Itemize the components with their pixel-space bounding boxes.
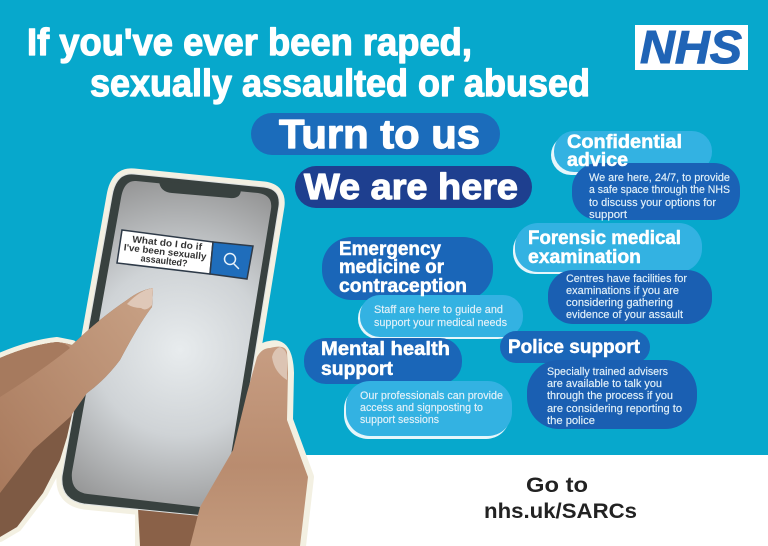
heading: mental health support: support: [321, 359, 394, 380]
right hand: [190, 347, 308, 546]
text: mental health support: access and signposting to: [360, 402, 483, 414]
text: emergency medicine: [374, 304, 507, 329]
banner: turn to us: Turn to us: [279, 111, 480, 157]
cream cut-out outline: [0, 174, 308, 546]
heading: mental health support: [321, 339, 450, 380]
text: forensic medical examination: examinations if you are: [566, 285, 679, 297]
text: police support: [547, 366, 682, 427]
search text: I've been sexually: [123, 242, 208, 263]
heading: confidential advice: [567, 132, 682, 171]
text: mental health support: Our professionals can provide: [360, 390, 503, 402]
panel: confidential advice: [551, 131, 740, 221]
heading: confidential advice: Confidential: [567, 132, 682, 153]
text: emergency medicine: support your medical needs: [374, 317, 507, 329]
search text: [122, 233, 209, 272]
heading: emergency medicine or contraception: Emergency: [339, 239, 441, 260]
heading: forensic medical examination: [528, 228, 681, 268]
text: police support: through the process if you: [547, 390, 673, 402]
text: confidential advice: We are here, 24/7, to provide: [589, 172, 730, 184]
left hand: [0, 288, 153, 537]
text: mental health support: support sessions: [360, 414, 439, 426]
title: [27, 22, 590, 105]
heading: forensic medical examination: Forensic medical: [528, 228, 681, 249]
heading: emergency medicine or contraception: [339, 239, 467, 297]
title: If you've ever been raped,: [27, 22, 472, 64]
thumbnail: [272, 347, 287, 380]
text: confidential advice: to discuss your options for: [589, 197, 716, 209]
text: police support: Specially trained advisers: [547, 366, 668, 378]
search text: assaulted?: [140, 253, 188, 270]
heading: emergency medicine or contraception: medicine or: [339, 257, 445, 278]
text: confidential advice: support: [589, 209, 627, 221]
icon: magnifying glass: [224, 254, 238, 268]
text: confidential advice: [589, 172, 730, 221]
heading: mental health support: Mental health: [321, 339, 450, 360]
text: forensic medical examination: considering gathering: [566, 297, 673, 309]
panel: police support: [500, 331, 697, 429]
phone body: [62, 174, 279, 516]
text: forensic medical examination: [566, 273, 687, 321]
heading: forensic medical examination: examination: [528, 247, 641, 268]
panel: emergency medicine or contraception: [322, 237, 523, 339]
text: emergency medicine: Staff are here to guide and: [374, 304, 503, 316]
text: police support: are available to talk you: [547, 378, 662, 390]
panel: forensic medical examination: [513, 223, 712, 324]
call to action: nhs.uk/SARCs: [484, 500, 637, 523]
call to action: [484, 474, 637, 523]
NHS logo: NHS: [640, 21, 742, 73]
phone notch: [159, 181, 241, 198]
phone illustration with hands: [0, 174, 308, 546]
text: police support: the police: [547, 415, 595, 427]
text: forensic medical examination: Centres have facilities for: [566, 273, 687, 285]
phone screen: [72, 181, 271, 507]
heading: emergency medicine or contraception: contraception: [339, 276, 467, 297]
search bar: [117, 230, 253, 279]
heading: confidential advice: advice: [567, 150, 628, 171]
fingernail: [127, 288, 153, 309]
panel: mental health support: [304, 338, 512, 439]
call to action: Go to: [526, 474, 588, 497]
heading: police support: Police support: [508, 337, 641, 358]
text: police support: are considering reporting to: [547, 403, 682, 415]
text: confidential advice: a safe space through the NHS: [589, 184, 730, 196]
search text: What do I do if: [132, 234, 203, 253]
title: sexually assaulted or abused: [90, 63, 590, 105]
banner: we are here: We are here: [304, 166, 518, 207]
text: forensic medical examination: evidence of your assault: [566, 309, 683, 321]
text: mental health support: [360, 390, 503, 426]
palm behind phone: [138, 508, 205, 546]
